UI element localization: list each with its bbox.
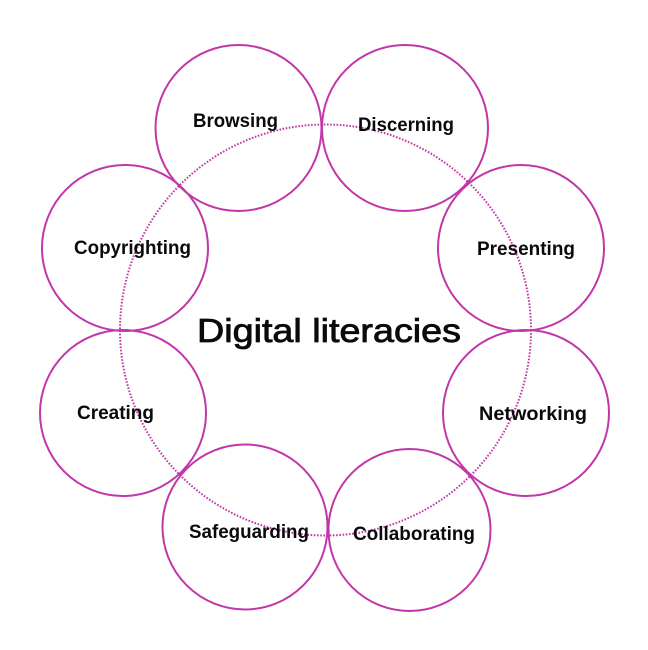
node: Browsing: Browsing [193,110,278,132]
node: Creating [40,330,206,496]
node: Browsing [156,45,322,211]
node: Collaborating [328,449,490,611]
node: Networking [443,330,609,496]
node: Copyrighting [42,165,208,331]
node: Creating: Creating [77,402,154,424]
node: Discerning [322,45,488,211]
node: Safeguarding: Safeguarding [189,521,309,543]
dotted central circle [120,124,531,536]
title: Digital literacies [197,312,461,349]
node: Presenting [438,165,604,331]
node: Discerning: Discerning [358,114,454,136]
node: Copyrighting: Copyrighting [74,237,191,259]
node: Collaborating: Collaborating [353,523,475,545]
node: Safeguarding [162,444,328,610]
node: Networking: Networking [479,403,587,425]
node: Presenting: Presenting [477,238,575,260]
